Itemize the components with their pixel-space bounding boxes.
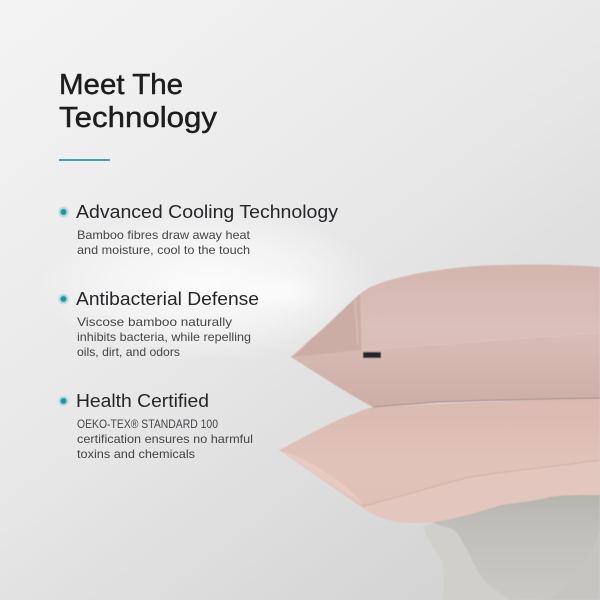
description: Viscose bamboo naturally xyxy=(77,315,232,329)
pillow label tag xyxy=(363,352,381,358)
product photo: pillows on stool xyxy=(279,265,600,600)
stool left lobe xyxy=(423,515,520,600)
icon: bullet xyxy=(58,206,69,218)
top pillow xyxy=(291,265,600,407)
title xyxy=(59,69,218,134)
description xyxy=(77,417,253,461)
description xyxy=(77,228,251,257)
heading: Antibacterial Defense xyxy=(76,289,259,309)
icon: bullet xyxy=(58,396,69,406)
description: toxins and chemicals xyxy=(77,447,195,461)
title: Technology xyxy=(59,102,218,134)
icon: bullet xyxy=(58,294,69,304)
stool centre dome xyxy=(432,492,600,600)
description: Bamboo fibres draw away heat xyxy=(77,228,251,242)
title: Meet The xyxy=(59,69,183,101)
stool right lobe xyxy=(540,525,600,600)
title accent line xyxy=(59,159,110,161)
stool xyxy=(423,492,600,600)
description: and moisture, cool to the touch xyxy=(77,243,250,257)
feature: health certified xyxy=(58,391,253,461)
feature: advanced cooling xyxy=(58,202,338,257)
description: oils, dirt, and odors xyxy=(77,345,180,359)
description xyxy=(77,315,251,359)
description: certification ensures no harmful xyxy=(77,432,253,446)
feature: antibacterial xyxy=(58,289,259,359)
bottom pillow xyxy=(279,398,600,523)
heading: Advanced Cooling Technology xyxy=(76,202,338,222)
heading: Health Certified xyxy=(76,391,209,411)
description: OEKO-TEX® STANDARD 100 xyxy=(77,417,218,431)
description: inhibits bacteria, while repelling xyxy=(77,330,251,344)
